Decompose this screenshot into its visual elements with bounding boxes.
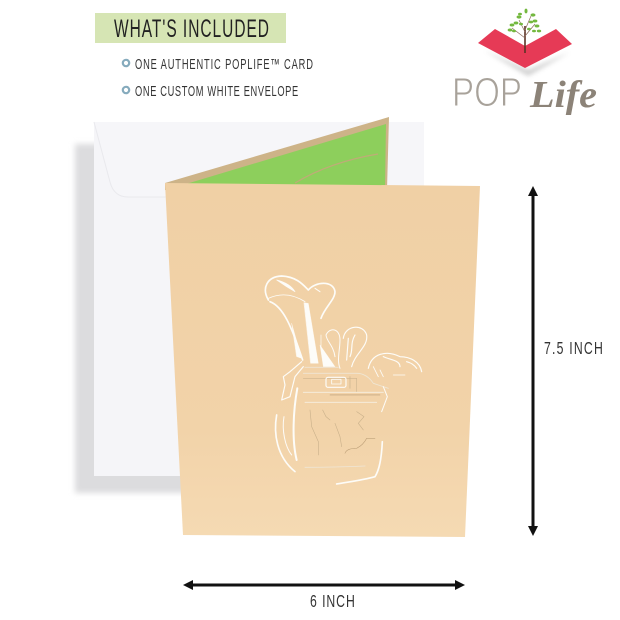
logo wordmark: POP	[452, 69, 522, 115]
height label: 7.5 INCH	[544, 339, 603, 359]
width label: 6 INCH	[310, 592, 355, 612]
card front	[165, 183, 480, 537]
logo chevron	[478, 29, 572, 76]
club shafts	[304, 303, 318, 363]
envelope shadow	[75, 144, 195, 493]
logo wordmark: Life	[529, 74, 597, 116]
logo: poplife	[452, 9, 597, 116]
bag body lines	[276, 415, 295, 472]
width arrow	[183, 580, 465, 590]
logo tree	[508, 9, 541, 53]
club heads	[265, 276, 335, 318]
envelope	[94, 122, 424, 476]
bag bottom	[337, 442, 382, 484]
heading: what's included: WHAT'S INCLUDED	[114, 15, 269, 43]
height arrow	[528, 186, 538, 536]
golf bag cutout	[265, 276, 422, 484]
card green inner	[186, 124, 386, 186]
iron heads	[326, 330, 340, 368]
card back panel	[165, 117, 389, 190]
envelope flap	[94, 122, 424, 197]
logo wordmark	[452, 69, 597, 116]
included items list	[123, 56, 313, 100]
bag top and pocket	[303, 367, 388, 388]
item: one custom white envelope: ONE CUSTOM WHITE ENVELOPE	[135, 83, 298, 100]
item: one authentic poplife card: ONE AUTHENTIC POPLIFE™ CARD	[135, 56, 313, 73]
bag left strap	[282, 362, 303, 400]
